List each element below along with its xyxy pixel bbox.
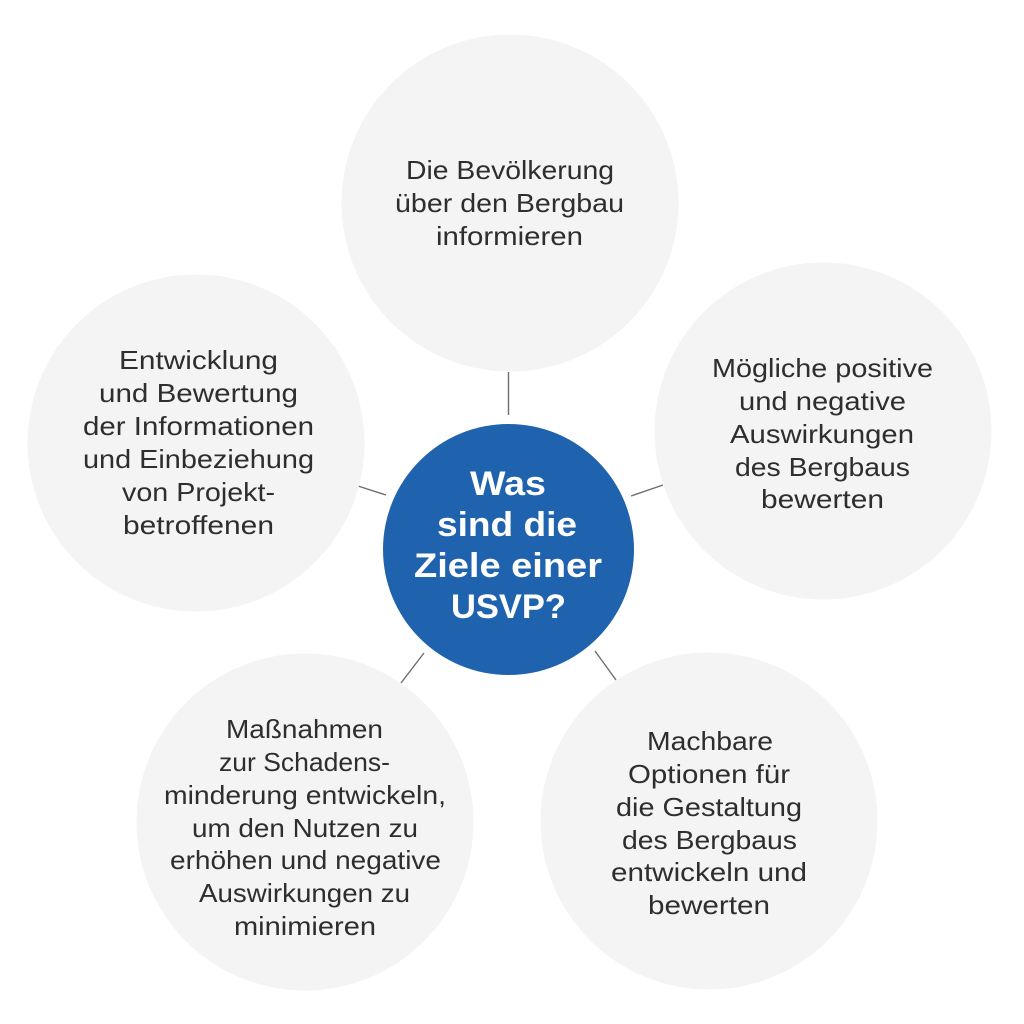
text: right goal <box>712 353 933 514</box>
heading: central question: Was <box>470 465 546 503</box>
text: bottom left goal: Auswirkungen zu <box>199 878 410 908</box>
text: left goal: der Informationen <box>83 411 314 441</box>
text: bottom right goal: Optionen für <box>628 759 790 789</box>
connector: right <box>631 485 663 496</box>
heading: central question: USVP? <box>451 588 566 626</box>
text: bottom right goal: bewerten <box>648 890 770 920</box>
text: bottom left goal: minderung entwickeln, <box>164 780 446 810</box>
connector: left <box>358 486 386 495</box>
heading: central question <box>414 465 602 626</box>
text: bottom right goal <box>611 726 807 920</box>
panel: central question <box>383 424 634 675</box>
text: right goal: Mögliche positive <box>712 353 933 383</box>
text: bottom right goal: Machbare <box>647 726 773 756</box>
text: right goal: und negative <box>739 386 906 416</box>
text: left goal: und Einbeziehung <box>83 444 314 474</box>
text: left goal: Entwicklung <box>119 345 278 375</box>
text: left goal: betroffenen <box>123 510 274 540</box>
text: top goal: informieren <box>436 221 583 251</box>
panel: right goal <box>654 262 992 600</box>
connector: top <box>508 372 510 415</box>
text: right goal: bewerten <box>761 484 884 514</box>
connector: bottom left <box>401 653 424 683</box>
heading: central question: Ziele einer <box>414 547 602 585</box>
text: top goal <box>395 155 624 251</box>
text: left goal <box>83 345 314 540</box>
text: bottom left goal: zur Schadens- <box>219 747 390 777</box>
panel: bottom left goal <box>136 654 474 990</box>
text: bottom right goal: entwickeln und <box>611 857 807 887</box>
panel: top goal <box>342 34 678 372</box>
text: bottom right goal: die Gestaltung <box>616 792 802 822</box>
connector: bottom right <box>595 651 616 680</box>
text: bottom left goal: um den Nutzen zu <box>192 813 418 843</box>
text: right goal: des Bergbaus <box>735 452 910 482</box>
text: top goal: über den Bergbau <box>395 188 624 218</box>
text: bottom right goal: des Bergbaus <box>622 825 797 855</box>
text: top goal: Die Bevölkerung <box>406 155 614 185</box>
text: bottom left goal: minimieren <box>234 911 376 941</box>
text: right goal: Auswirkungen <box>730 419 914 449</box>
text: bottom left goal: erhöhen und negative <box>170 845 441 875</box>
text: bottom left goal <box>164 714 446 941</box>
panel: bottom right goal <box>540 652 878 990</box>
heading: central question: sind die <box>437 506 577 544</box>
text: left goal: von Projekt- <box>122 477 275 507</box>
text: left goal: und Bewertung <box>99 378 298 408</box>
text: bottom left goal: Maßnahmen <box>226 714 383 744</box>
panel: left goal <box>28 274 364 612</box>
